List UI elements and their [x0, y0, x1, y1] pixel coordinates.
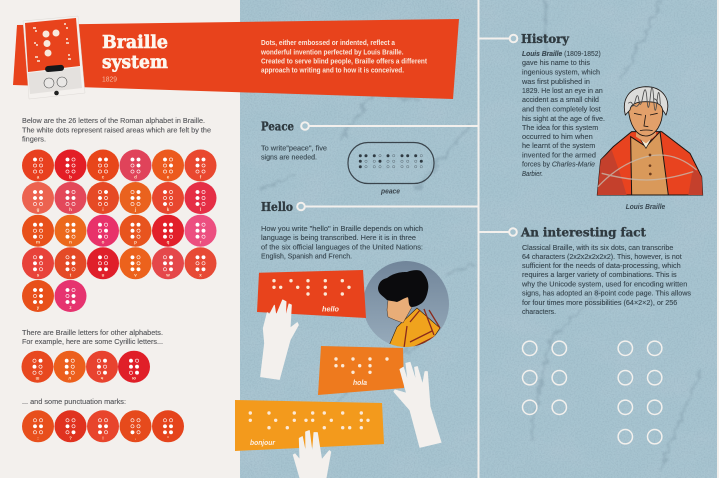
cyrillic braille letters — [22, 351, 150, 383]
portrait: child — [363, 261, 449, 350]
heading: an interesting fact: An interesting fact — [520, 226, 646, 240]
braille alphabet grid: d — [134, 174, 137, 180]
intro text: wonderful invention perfected by Louis Braille. — [260, 47, 404, 56]
braille alphabet grid: f — [200, 174, 202, 180]
interesting fact text: sufficient for the needs of data-processing, which — [522, 261, 681, 270]
braille alphabet grid: b — [69, 174, 72, 180]
braille alphabet grid: g — [37, 207, 40, 212]
intro text: Dots, either embossed or indented, reflect a — [261, 38, 396, 47]
vertical divider line — [478, 0, 480, 478]
braille alphabet grid: c — [102, 174, 105, 180]
history text: gave his name to this — [522, 58, 590, 67]
braille alphabet grid: a — [37, 174, 40, 180]
braille alphabet grid: i — [102, 207, 104, 212]
interesting fact text: characters. — [522, 307, 556, 316]
cyrillic braille letters: л — [68, 376, 71, 381]
braille alphabet grid — [22, 150, 216, 312]
punctuation braille marks — [22, 410, 184, 442]
history text — [521, 49, 605, 178]
hello text: How you write "hello" in Braille depends on which — [261, 224, 423, 233]
portrait: Louis Braille — [597, 87, 703, 195]
alphabet introduction text: fingers. — [22, 134, 46, 144]
braille alphabet grid: s — [37, 272, 40, 277]
peace braille pill — [348, 142, 434, 184]
interesting fact text: 64 characters (2x2x2x2x2x2). This, however, is not — [522, 252, 683, 261]
punctuation text: ... and some punctuation marks: — [22, 397, 126, 406]
braille alphabet grid: w — [165, 272, 170, 277]
eight dot cell diagram — [618, 341, 662, 444]
peace text: signs are needed. — [261, 153, 317, 162]
alphabet introduction text — [22, 116, 211, 144]
icon: stamp book cover — [23, 16, 85, 99]
history text: Barbier. — [522, 169, 543, 178]
hello text: of the six official languages of the United Nations: — [261, 242, 423, 251]
history text: his sight at the age of five. — [522, 114, 605, 123]
braille alphabet grid: p — [134, 240, 137, 245]
history text: 1829. He lost an eye in an — [522, 86, 603, 95]
portrait caption: Louis Braille — [626, 204, 665, 211]
interesting fact text — [521, 243, 691, 316]
braille alphabet grid: y — [37, 305, 40, 310]
cyrillic text: There are Braille letters for other alphabets. — [22, 328, 163, 337]
punctuation braille marks: : — [37, 435, 39, 440]
cyrillic text: For example, here are some Cyrillic letters... — [22, 337, 163, 346]
history text: ingenious system, which — [522, 68, 600, 76]
intro text: Created to serve blind people, Braille offers a different — [261, 56, 427, 66]
braille alphabet grid: z — [69, 305, 72, 310]
peace text — [261, 144, 327, 162]
hello text: language is being transcribed. Here it is in three — [261, 233, 416, 242]
six dot cell diagram — [522, 341, 566, 414]
history text: invented for the armed — [522, 150, 596, 160]
punctuation braille marks: " — [167, 435, 169, 440]
braille alphabet grid: j — [134, 207, 136, 212]
card: bonjour — [235, 400, 384, 451]
cyrillic braille letters: ч — [101, 376, 104, 381]
alphabet introduction text: Below are the 26 letters of the Roman alphabet in Braille. — [22, 116, 205, 125]
interesting fact text: Classical Braille, with its six dots, can transcribe — [522, 243, 673, 252]
hello text — [261, 224, 423, 260]
history text: Louis Braille (1809-1852) — [522, 49, 601, 58]
history text: was first published in — [521, 77, 590, 86]
icon: hand on bonjour card — [293, 431, 331, 478]
cyrillic braille letters: ю — [132, 376, 136, 381]
card: hola: hola — [353, 380, 367, 387]
punctuation braille marks: ! — [102, 435, 104, 440]
card: hello: hello — [322, 306, 340, 314]
braille alphabet grid: k — [167, 207, 170, 212]
history text: and then completely lost — [522, 104, 602, 114]
heading: history: History — [521, 32, 570, 46]
braille alphabet grid: h — [69, 207, 72, 212]
heading: peace — [261, 120, 478, 134]
braille alphabet grid: o — [102, 240, 105, 245]
card: hola — [318, 346, 404, 395]
braille alphabet grid: r — [200, 240, 202, 245]
card: bonjour: bonjour — [250, 440, 276, 447]
interesting fact text: for four times more possibilities (64×2×2), or 256 — [522, 298, 677, 307]
braille alphabet grid: q — [167, 240, 170, 245]
heading: hello — [261, 200, 478, 214]
heading: hello: Hello — [261, 200, 293, 214]
intro text: approach to writing and to how it is conceived. — [261, 66, 404, 75]
title: 1829 — [102, 74, 117, 84]
header banner — [13, 19, 459, 99]
cyrillic text — [22, 328, 163, 346]
heading: peace: Peace — [261, 120, 294, 134]
peace caption: peace — [380, 188, 400, 195]
history text: accident as a small child — [522, 95, 599, 104]
title: system — [102, 53, 168, 73]
braille alphabet grid: v — [134, 272, 137, 277]
history text: forces by Charles-Marie — [522, 160, 595, 168]
heading: history — [478, 32, 570, 46]
icon: hand on hello card — [261, 300, 298, 379]
hello text: English, Spanish and French. — [261, 252, 352, 260]
punctuation braille marks: . — [135, 435, 136, 440]
background: textured blue panel — [240, 0, 717, 478]
interesting fact text: signs, has adopted an 8-point code page. This allows — [522, 288, 691, 298]
interesting fact text: requires a larger variety of combinations. This is — [522, 270, 677, 279]
icon: hand on hola card — [394, 362, 441, 447]
braille alphabet grid: n — [69, 240, 72, 245]
braille alphabet grid: u — [102, 272, 105, 277]
history text: occurred to him when — [522, 132, 593, 141]
braille alphabet grid: t — [70, 272, 72, 277]
title — [102, 33, 168, 84]
interesting fact text: why the Unicode system, used for encoding written — [521, 280, 687, 288]
punctuation braille marks: ? — [69, 435, 72, 440]
peace text: To write"peace", five — [261, 144, 327, 152]
alphabet introduction text: The white dots represent raised areas which are felt by the — [22, 125, 211, 134]
title: Braille — [102, 33, 168, 53]
braille alphabet grid: x — [199, 272, 202, 277]
braille alphabet grid: l — [200, 207, 201, 212]
intro text — [260, 38, 427, 75]
braille alphabet grid: m — [36, 240, 40, 245]
cyrillic braille letters: ш — [36, 376, 40, 381]
history text: The idea for this system — [522, 123, 598, 132]
braille alphabet grid: e — [167, 174, 170, 180]
history text: he learnt of the system — [522, 141, 595, 150]
card: hello — [257, 270, 366, 318]
